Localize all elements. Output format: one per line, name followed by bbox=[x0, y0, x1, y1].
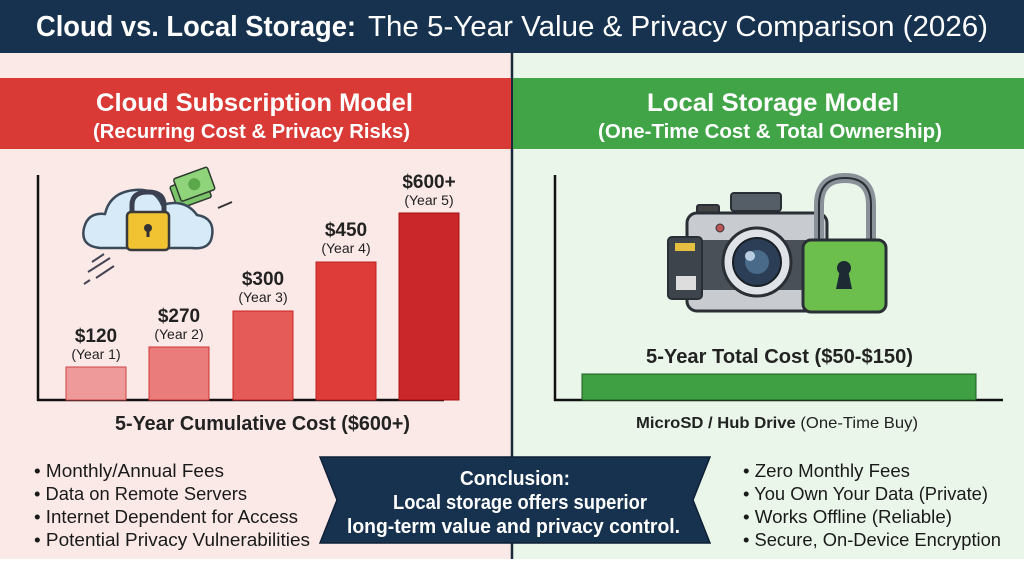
heading: cloud model bbox=[0, 78, 511, 149]
text block: cloud drawbacks bbox=[34, 461, 310, 550]
callout: conclusion banner: Conclusion: bbox=[460, 468, 570, 490]
text block: cloud drawbacks: • Monthly/Annual Fees bbox=[34, 461, 224, 481]
bar chart: cloud cumulative cost: $450 bbox=[325, 220, 367, 241]
text block: local benefits: • Zero Monthly Fees bbox=[743, 461, 910, 481]
heading: local model: Local Storage Model bbox=[647, 89, 899, 117]
bar chart: cloud cumulative cost bbox=[37, 172, 459, 435]
chart: local one-time cost: 5-Year Total Cost ($50-$150) bbox=[646, 346, 913, 368]
title: Cloud vs. Local Storage: bbox=[36, 11, 356, 43]
title: The 5-Year Value & Privacy Comparison (2026) bbox=[368, 11, 988, 43]
text block: local benefits bbox=[743, 461, 1001, 550]
bar chart: cloud cumulative cost: $600+ bbox=[402, 172, 456, 193]
callout: conclusion banner: Local storage offers superior bbox=[393, 492, 647, 514]
bar chart: cloud cumulative cost: 5-Year Cumulative Cost ($600+) bbox=[115, 413, 410, 435]
bar chart: cloud cumulative cost: (Year 3) bbox=[238, 289, 288, 305]
callout: conclusion banner: long-term value and privacy control. bbox=[347, 516, 680, 538]
bar chart: cloud cumulative cost: $270 bbox=[158, 306, 200, 327]
bar chart: cloud cumulative cost: (Year 4) bbox=[321, 240, 371, 256]
chart: local one-time cost bbox=[554, 175, 1003, 432]
text block: cloud drawbacks: • Potential Privacy Vulnerabilities bbox=[34, 530, 310, 550]
bar chart: cloud cumulative cost: (Year 5) bbox=[404, 192, 454, 208]
bar chart: cloud cumulative cost: (Year 2) bbox=[154, 326, 204, 342]
text block: local benefits: • Works Offline (Reliable) bbox=[743, 507, 952, 527]
heading: local model bbox=[513, 78, 1024, 149]
icon: cloud with lock and money bbox=[83, 167, 232, 284]
callout: conclusion banner bbox=[320, 457, 710, 543]
heading: cloud model: Cloud Subscription Model bbox=[96, 89, 413, 117]
heading: local model: (One-Time Cost & Total Ownership) bbox=[598, 121, 942, 143]
bar chart: cloud cumulative cost: $300 bbox=[242, 269, 284, 290]
icon: camera with padlock bbox=[668, 178, 886, 312]
bar chart: cloud cumulative cost: (Year 1) bbox=[71, 346, 121, 362]
title bbox=[0, 0, 1024, 53]
text block: local benefits: • Secure, On-Device Encryption bbox=[743, 530, 1001, 550]
text block: local benefits: • You Own Your Data (Private) bbox=[743, 484, 988, 504]
chart: local one-time cost: MicroSD / Hub Drive (One-Time Buy) bbox=[636, 415, 918, 432]
text block: cloud drawbacks: • Internet Dependent for Access bbox=[34, 507, 298, 527]
text block: cloud drawbacks: • Data on Remote Servers bbox=[34, 484, 247, 504]
heading: cloud model: (Recurring Cost & Privacy Risks) bbox=[93, 121, 410, 143]
bar chart: cloud cumulative cost: $120 bbox=[75, 326, 117, 347]
